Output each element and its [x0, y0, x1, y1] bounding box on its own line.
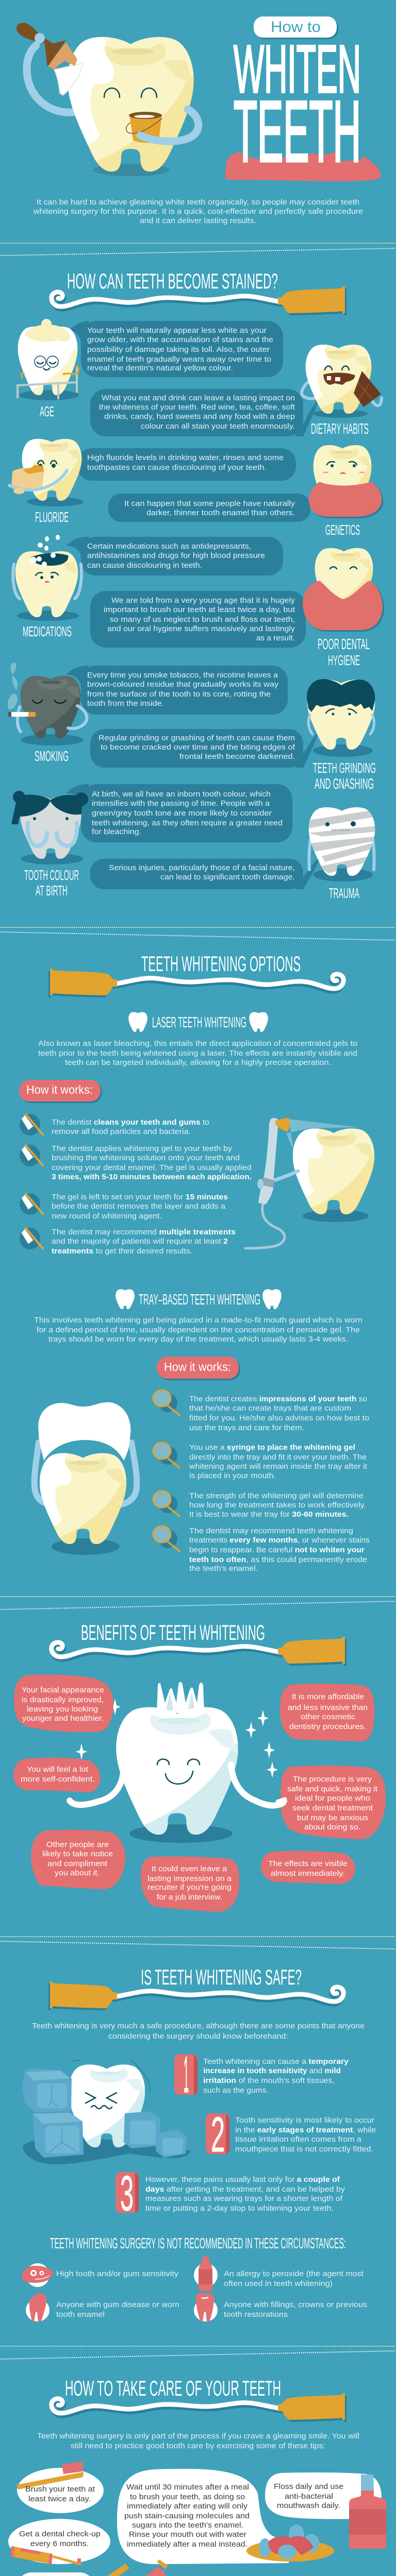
tray steps: It is best to wear the tray for 30-60 minutes.: [189, 1510, 349, 1519]
not recommended: allergy: [194, 2256, 364, 2291]
care intro text: still need to practice good tooth care by exercising some of these tips:: [71, 2442, 325, 2450]
bubble: fluoride: High fluoride levels in drinking water, rinses and some: [87, 453, 284, 462]
tooth: fluoride: [9, 437, 84, 506]
callout: recruiter: for a job interview.: [157, 1893, 222, 1902]
hero tooth painting itself: [16, 23, 199, 181]
tray steps: whitening agent will remain inside the tray after it: [189, 1462, 368, 1471]
point 1: [174, 2046, 349, 2104]
tip: brush: least twice a day.: [28, 2495, 91, 2503]
tray steps: that he/she can create trays that are custom: [189, 1404, 351, 1413]
tooth: trauma: [308, 807, 375, 882]
bubble: grinding: [90, 729, 319, 768]
bubble: dietary: [90, 389, 319, 436]
not recommended: fillings: [194, 2293, 367, 2322]
laser steps: The gel is left to set on your teeth for 15 minutes: [52, 1193, 228, 1201]
text: FLUORIDE: [35, 509, 69, 525]
toothpaste divider: [52, 286, 346, 315]
how to pill: How to: [271, 19, 321, 36]
bubble: medications: Certain medications such as antidepressants,: [87, 542, 251, 551]
callout: self-confident: [13, 1758, 100, 1792]
illustration: tray on tooth: [35, 1402, 137, 1555]
tray intro text: This involves teeth whitening gel being placed in a made-to-fit mouth guard which is worn: [34, 1316, 362, 1325]
tooth: age: [16, 319, 79, 400]
tray steps: The strength of the whitening gel will determine: [189, 1492, 364, 1500]
bubble: fluoride: toothpastes can cause discolouring of your teeth.: [87, 463, 267, 472]
intro text: whitening surgery for this purpose. It is a quick, cost-effective and perfectly safe procedure: [33, 207, 363, 216]
callout: facial appearance: leaving you looking: [27, 1705, 98, 1714]
bubble: smoking: tooth from the inside.: [87, 699, 164, 708]
point 3: measures such as wearing trays for a shorter length of: [145, 2194, 343, 2203]
bubble: age: Your teeth will naturally appear less white as your: [87, 326, 267, 335]
illustration: laser on tooth: [245, 1118, 377, 1248]
heading: laser teeth whitening: [128, 1012, 268, 1032]
bubble: medications: [66, 537, 283, 575]
pill: how it works: [19, 1080, 102, 1103]
bubble: medications: antihistamines and drugs for high blood pressure: [87, 551, 265, 560]
laser steps: The dentist may recommend multiple treatments: [52, 1228, 236, 1236]
laser intro text: teeth can be targeted individually, allowing for a highly precise operation.: [65, 1058, 331, 1067]
panel: stain bubbles: [66, 321, 321, 889]
tray steps: You use a syringe to place the whitening gel: [189, 1443, 355, 1452]
bubble: hygiene: We are told from a very young age that it is hugely: [111, 596, 295, 605]
callout: facial appearance: younger and healthier.: [22, 1714, 104, 1723]
tooth: birth colour: [11, 791, 88, 865]
point 3: days after getting the treatment, and can be helped by: [145, 2185, 345, 2194]
tray steps: the teeth's enamel.: [189, 1564, 258, 1573]
bubble: hygiene: so many of us neglect to brush and floss our teeth,: [110, 615, 295, 624]
callout: compliment: you about it.: [55, 1869, 100, 1877]
tray intro text: [34, 1316, 362, 1344]
laser intro text: teeth prior to the teeth being whitened using a laser. The effects are instantly visible and: [38, 1049, 357, 1058]
tray steps: fitted for you. He/she also advises on how best to: [189, 1414, 369, 1422]
heading: laser teeth whitening: LASER TEETH WHITENING: [152, 1014, 246, 1031]
callout: affordable: dentistry procedures.: [289, 1722, 366, 1731]
bubble: dietary: the whiteness of your teeth. Red wine, tea, coffee, soft: [99, 403, 295, 412]
laser steps: covering your dental enamel. The gel is usually applied: [52, 1163, 252, 1172]
not recommended: sensitivity: [22, 2263, 179, 2287]
tip: wait 30 minutes: Wait until 30 minutes after a meal: [126, 2483, 249, 2492]
laser intro text: [38, 1039, 357, 1067]
point 1: such as the gums.: [203, 2086, 269, 2095]
pill: how it works: How it works:: [164, 1360, 231, 1374]
laser intro text: Also known as laser bleaching, this entails the direct application of concentrated gels to: [38, 1039, 357, 1048]
tray steps: directly into the tray and fit it over your teeth. The: [189, 1453, 367, 1462]
bubble: hygiene: and our oral hygiene suffers massively and lastingly: [107, 624, 295, 633]
tray steps: use the trays and care for them.: [189, 1423, 304, 1432]
not recommended: sensitivity: High tooth and/or gum sensitivity: [56, 2269, 179, 2278]
bubble: tooth colour: intensifies with the passing of time. People with a: [92, 799, 270, 808]
callout: safe and quick: seek dental treatment: [292, 1804, 373, 1812]
bubble: trauma: Serious injuries, particularly those of a facial nature,: [109, 863, 295, 872]
tip: floss and mouthwash: anti-bacterial: [285, 2492, 333, 2501]
bubble: dietary: What you eat and drink can leave a lasting impact on: [102, 394, 295, 402]
tray steps: treatments every few months , or whenever stains: [189, 1536, 370, 1545]
callout: compliment: [31, 1830, 125, 1889]
label: tooth colour at birth: AT BIRTH: [36, 883, 68, 899]
bubble: tooth colour: green/grey tooth tone are more likely to consider: [92, 809, 272, 818]
tip: minimise beverages: [125, 2560, 287, 2576]
callout: affordable: and less invasive than: [288, 1703, 368, 1712]
intro text: It can be hard to achieve gleaming white teeth organically, so people may consider teeth: [37, 198, 359, 207]
tip: brush: Brush your teeth at: [25, 2485, 95, 2494]
point 1: 1: [184, 2046, 189, 2104]
toothpaste divider: [48, 969, 343, 997]
bubble: grinding: Regular grinding or gnashing of teeth can cause them: [98, 734, 295, 742]
not recommended: gum disease: tooth enamel: [56, 2310, 105, 2319]
tip: wait 30 minutes: push stain-causing molecules and: [124, 2512, 250, 2520]
tip: wait 30 minutes: to brush your teeth, as doing so: [130, 2493, 245, 2501]
point 3: However, these pains usually last only for a couple of: [145, 2175, 340, 2184]
callout: effects visible: [261, 1851, 355, 1884]
text: MEDICATIONS: [23, 623, 72, 639]
tray steps: begin to reappear. Be careful not to whiten your: [189, 1546, 365, 1554]
point 3: time or putting a 2-day stop to whitening your teeth.: [145, 2204, 334, 2213]
safe intro text: Teeth whitening is very much a safe procedure, although there are some points that anyone: [32, 2022, 365, 2030]
not recommended: gum disease: [26, 2293, 179, 2322]
bubble: fluoride: [77, 448, 296, 481]
tray steps: how long the treatment takes to work effectively.: [189, 1501, 366, 1510]
bubble: grinding: frontal teeth become darkened.: [179, 752, 295, 761]
laser steps: and the majority of patients will require at least 2: [52, 1237, 228, 1246]
laser steps: The dentist applies whitening gel to your teeth by: [52, 1144, 233, 1153]
toothpaste divider: [52, 1637, 346, 1666]
laser steps: [20, 1114, 252, 1256]
pill: how it works: How it works:: [26, 1083, 93, 1096]
bubble: hygiene: important to brush our teeth at least twice a day, but: [104, 605, 295, 614]
tooth: grinding: [305, 677, 377, 757]
bubble: trauma: [90, 856, 321, 889]
bubble: genetics: It can happen that some people have naturally: [124, 499, 295, 508]
gum: [225, 151, 381, 181]
bubble: hygiene: [90, 591, 306, 648]
tip: brush: [16, 2462, 104, 2513]
tip: check-up: every 6 months.: [30, 2539, 89, 2548]
safe intro text: considering the surgery should know beforehand:: [108, 2032, 288, 2041]
heading: tray-based teeth whitening: TRAY–BASED TEETH WHITENING: [139, 1292, 260, 1308]
bubble: medications: can cause discolouring in teeth.: [87, 561, 202, 570]
callout: effects visible: The effects are visible: [268, 1859, 348, 1868]
bubble: age: possibility of damage taking its toll. Also, the outer: [87, 345, 270, 354]
laser steps: remove all food particles and bacteria.: [52, 1127, 191, 1136]
callout: safe and quick: ideal for people who: [295, 1794, 370, 1803]
tooth: dietary habits: [302, 343, 382, 418]
tray steps: teeth too often , as this could permanently erode: [189, 1555, 367, 1564]
bubble: dietary: drinks, candy, hard sweets and any food with a deep: [104, 412, 295, 421]
bubble: tooth colour: for bleaching.: [92, 827, 141, 836]
bubble: age: [68, 321, 283, 377]
tray steps: is placed in your mouth.: [189, 1471, 276, 1480]
callout: effects visible: almost immediately.: [271, 1869, 345, 1878]
callout: recruiter: lasting impression on a: [147, 1874, 232, 1883]
bubble: hygiene: as a result.: [256, 634, 295, 642]
point 1: irritation of the mouth's soft tissues,: [203, 2076, 335, 2085]
point 3: 3: [120, 2166, 134, 2221]
tray steps: The dentist creates impressions of your teeth so: [189, 1395, 367, 1403]
bubble: smoking: [66, 666, 288, 715]
bubble: tooth colour: At birth, we all have an inborn tooth colour, which: [92, 790, 271, 799]
laser steps: before the dentist removes the layer and adds a: [52, 1202, 226, 1211]
callout: compliment: likely to take notice: [42, 1850, 113, 1858]
bubble: smoking: Every time you smoke tobacco, the nicotine leaves a: [87, 671, 278, 680]
tooth: smoking: [8, 663, 87, 745]
callout: affordable: It is more affordable: [292, 1692, 364, 1701]
callout: safe and quick: about doing so.: [304, 1823, 360, 1832]
tip: wait 30 minutes: Rinse your mouth out with water: [129, 2530, 246, 2539]
tip: wait 30 minutes: sugars into the teeth's enamel.: [132, 2521, 243, 2530]
tip: check-up: [8, 2519, 110, 2564]
tip: floss and mouthwash: mouthwash daily.: [277, 2501, 340, 2510]
callout: self-confident: more self-confident.: [21, 1775, 95, 1784]
tray steps: [153, 1390, 370, 1573]
tray intro text: for a defined period of time, usually dependent on the concentration of peroxide gel. The: [37, 1326, 360, 1334]
point 2: Tooth sensitivity is most likely to occur: [235, 2116, 374, 2125]
bubble: smoking: brown-coloured residue that gradually works its way: [87, 680, 279, 689]
sparkles: [76, 1699, 278, 1778]
not recommended: allergy: often used in teeth whitening): [224, 2279, 333, 2288]
callout: compliment: Other people are: [46, 1840, 109, 1849]
point 2: tissue irritation often comes from a: [235, 2135, 362, 2144]
not recommended: fillings: Anyone with fillings, crowns or previous: [224, 2300, 367, 2309]
not recommended: allergy: An allergy to peroxide (the agent most: [224, 2269, 364, 2278]
tip: wait 30 minutes: immediately after eating will only: [127, 2502, 248, 2511]
label: poor dental hygiene: HYGIENE: [328, 652, 360, 668]
bubble: age: grow older, with the accumulation of stains and the: [87, 335, 273, 344]
bubble: trauma: can lead to significant tooth damage.: [160, 873, 295, 882]
intro text: [33, 198, 363, 225]
bubble: genetics: darker, thinner tooth enamel than others.: [146, 509, 295, 517]
tooth: poor hygiene: [303, 546, 384, 632]
illustration: happy white tooth with crown: [70, 1682, 285, 1843]
callout: facial appearance: Your facial appearance: [22, 1686, 104, 1694]
callout: affordable: [280, 1684, 374, 1741]
tooth: genetics: [309, 443, 383, 518]
callout: safe and quick: The procedure is very: [293, 1775, 372, 1784]
point 2: [206, 2107, 376, 2162]
point 2: in the early stages of treatment , while: [235, 2126, 376, 2134]
care intro text: [37, 2432, 359, 2450]
intro text: and it can deliver lasting results.: [140, 216, 256, 225]
safe intro text: [32, 2022, 365, 2041]
tip: wait 30 minutes: immediately after a meal instead.: [127, 2540, 248, 2549]
callout: affordable: other cosmetic: [301, 1713, 356, 1721]
text: SMOKING: [35, 748, 69, 764]
laser steps: The dentist cleans your teeth and gums to: [52, 1118, 209, 1127]
tip: floss and mouthwash: Floss daily and use: [274, 2482, 343, 2491]
bubble: age: enamel of teeth gradually wears away over time to: [87, 355, 271, 364]
tray intro text: trays should be worn for every day of the treatment, which usually lasts 3-4 weeks.: [48, 1335, 348, 1344]
tip: do not smoke: [16, 2564, 129, 2576]
callout: self-confident: You will feel a lot: [27, 1765, 89, 1774]
bubble: tooth colour: [66, 784, 292, 842]
callout: recruiter: [141, 1856, 239, 1912]
callout: facial appearance: [14, 1675, 113, 1732]
text: AGE: [40, 403, 54, 419]
toothpaste divider: [48, 1981, 343, 2010]
tip: floss and mouthwash: [265, 2472, 386, 2549]
bubble: tooth colour: teeth whitening, as they often require a greater need: [92, 819, 283, 827]
bubble: smoking: from the surface of the tooth to its core, rotting the: [87, 690, 271, 699]
not recommended: gum disease: Anyone with gum disease or worn: [56, 2300, 179, 2309]
label: trauma: TRAUMA: [329, 885, 359, 901]
bubble: age: reveal the dentin's natural yellow colour.: [87, 364, 233, 372]
laser steps: treatments to get their desired results.: [52, 1247, 192, 1256]
pill: how it works: [157, 1357, 240, 1380]
illustration: sensitive tooth with ice cubes: [22, 2060, 191, 2164]
tray steps: The dentist may recommend teeth whitening: [189, 1527, 353, 1535]
point 3: [116, 2166, 345, 2221]
callout: recruiter: It could even leave a: [152, 1865, 227, 1873]
not recommended: fillings: tooth restorations: [224, 2310, 288, 2319]
label: tooth colour at birth: [24, 867, 79, 899]
tooth: medications: [13, 535, 81, 622]
care intro text: Teeth whitening surgery is only part of the process if you crave a gleaming smile. You will: [37, 2432, 359, 2441]
callout: recruiter: recruiter if you're going: [147, 1883, 232, 1892]
tip: wait 30 minutes: [117, 2469, 334, 2564]
callout: safe and quick: [276, 1766, 386, 1839]
callout: facial appearance: is drastically improved,: [22, 1696, 104, 1704]
text: TOOTH COLOUR: [24, 867, 79, 883]
heading: tray-based teeth whitening: [116, 1290, 282, 1309]
bubble: dietary: colour can all stain your teeth enormously.: [141, 422, 295, 431]
point 2: mouthpiece that is not correctly fitted.: [235, 2145, 373, 2154]
title: [234, 31, 361, 180]
bubble: genetics: [108, 494, 310, 522]
tip: check-up: Get a dental check-up: [19, 2530, 101, 2538]
laser steps: new round of whitening agent.: [52, 1212, 162, 1221]
callout: safe and quick: safe and quick, making it: [287, 1785, 378, 1793]
laser steps: 3 times, with 5-10 minutes between each application.: [52, 1173, 252, 1181]
label: poor dental hygiene: [318, 636, 370, 668]
point 1: Teeth whitening can cause a temporary: [203, 2057, 349, 2066]
label: teeth grinding: [313, 760, 376, 792]
point 1: increase in tooth sensitivity and mild: [203, 2066, 341, 2075]
bubble: grinding: to become cracked over time and the biting edges of: [101, 743, 295, 752]
toothpaste divider: [52, 2393, 346, 2422]
callout: safe and quick: but may be anxious: [297, 1814, 368, 1822]
how to pill: [254, 16, 338, 39]
callout: compliment: and compliment: [47, 1859, 108, 1868]
point 2: 2: [211, 2107, 225, 2162]
laser steps: brushing the whitening solution onto your teeth and: [52, 1154, 240, 1162]
